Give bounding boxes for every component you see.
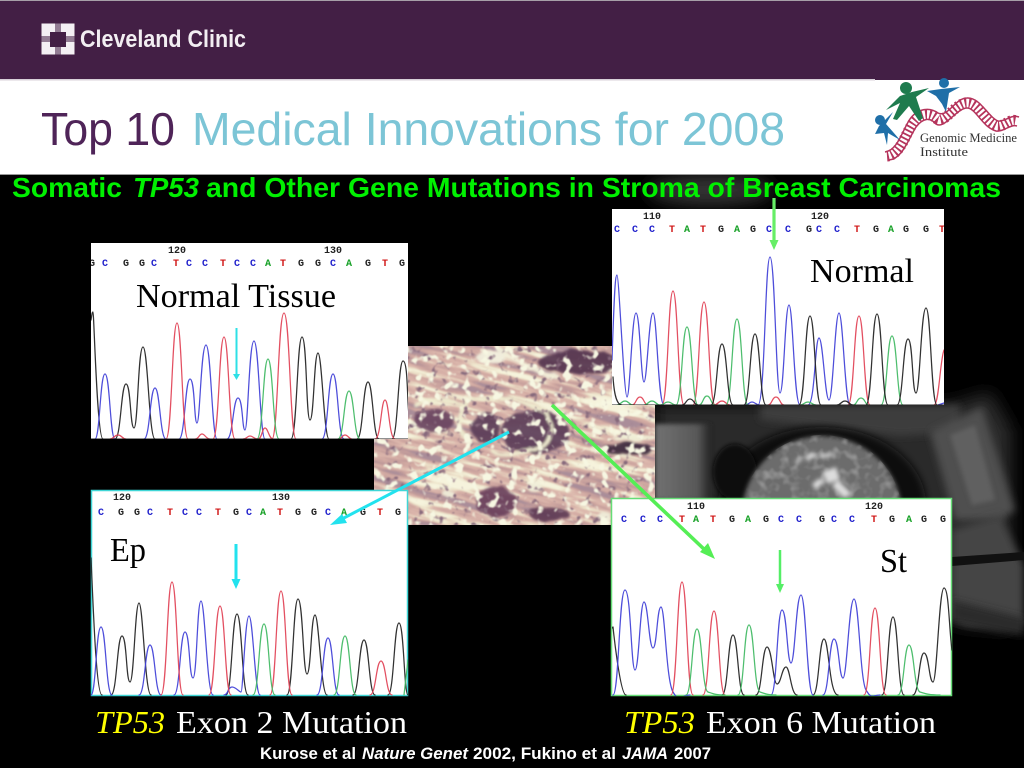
- position numbers: 130: [324, 246, 342, 257]
- caption: exon 2: TP53: [95, 704, 165, 740]
- specimen mound: [741, 434, 903, 498]
- base sequence: T: [277, 508, 283, 519]
- base sequence: G: [298, 259, 304, 270]
- label: Normal Tissue: Normal Tissue: [136, 278, 336, 315]
- position numbers: 120: [811, 212, 829, 223]
- base sequence: T: [215, 508, 221, 519]
- base sequence: T: [854, 225, 860, 236]
- base sequence: C: [202, 259, 208, 270]
- caption: exon 2: Exon 2 Mutation: [176, 704, 407, 740]
- base sequence: T: [871, 515, 877, 526]
- base sequence: [614, 226, 944, 232]
- base sequence: C: [796, 515, 802, 526]
- citation: [260, 745, 711, 763]
- base sequence: C: [649, 225, 655, 236]
- white title band: [0, 78, 1024, 175]
- background photo: surgical specimen: [648, 174, 1024, 636]
- panel: stroma chromatogram: [612, 498, 952, 698]
- citation: Nature Genet: [362, 745, 470, 763]
- base sequence: G: [315, 259, 321, 270]
- base sequence: A: [260, 508, 266, 519]
- chromatogram traces: [91, 558, 408, 695]
- base sequence: G: [295, 508, 301, 519]
- base sequence: T: [700, 225, 706, 236]
- base sequence: A: [684, 225, 690, 236]
- caption: exon 6: [624, 704, 936, 740]
- arrow: cyan marker: [233, 328, 240, 380]
- base sequence: G: [365, 259, 371, 270]
- base sequence: T: [280, 259, 286, 270]
- base sequence: A: [734, 225, 740, 236]
- base sequence: G: [395, 508, 401, 519]
- base sequence: C: [98, 508, 104, 519]
- base sequence: C: [246, 508, 252, 519]
- base sequence: G: [123, 259, 129, 270]
- base sequence: C: [234, 259, 240, 270]
- base sequence: G: [718, 225, 724, 236]
- base sequence: G: [139, 259, 145, 270]
- base sequence: C: [614, 225, 620, 236]
- position numbers: 120: [113, 493, 131, 504]
- base sequence: G: [819, 515, 825, 526]
- icon: Cleveland Clinic mark: [42, 24, 74, 55]
- chromatogram traces: [612, 582, 952, 698]
- base sequence: A: [341, 508, 347, 519]
- base sequence: T: [939, 225, 945, 236]
- base sequence: T: [220, 259, 226, 270]
- base sequence: G: [873, 225, 879, 236]
- citation: 2007: [674, 745, 711, 763]
- base sequence: A: [693, 515, 699, 526]
- position numbers: [113, 493, 290, 504]
- base sequence: T: [669, 225, 675, 236]
- label: Normal: Normal: [810, 253, 914, 290]
- header band with logo: [0, 0, 1024, 80]
- citation: 2002, Fukino et al: [473, 745, 616, 763]
- logo caption: [920, 131, 1017, 159]
- base sequence: C: [657, 515, 663, 526]
- green figure: [886, 82, 929, 121]
- base sequence: T: [710, 515, 716, 526]
- base sequence: G: [233, 508, 239, 519]
- position numbers: [643, 212, 829, 223]
- base sequence: C: [834, 225, 840, 236]
- base sequence: T: [679, 515, 685, 526]
- base sequence: G: [399, 259, 405, 270]
- icon: Genomic Medicine Institute logo: [875, 78, 1019, 160]
- caption: exon 2: [95, 704, 407, 740]
- banner heading: Top 10: [41, 103, 175, 155]
- slide title: Somatic: [12, 172, 122, 203]
- blue figures: [875, 78, 960, 145]
- base sequence: A: [265, 259, 271, 270]
- base sequence: C: [785, 225, 791, 236]
- panel: epithelium chromatogram: [91, 490, 408, 696]
- logo caption: Institute: [920, 145, 969, 159]
- slide title: TP53: [133, 172, 199, 203]
- base sequence: G: [118, 508, 124, 519]
- base sequence: G: [923, 225, 929, 236]
- base sequence: T: [167, 508, 173, 519]
- position numbers: 120: [865, 502, 883, 513]
- base sequence: G: [311, 508, 317, 519]
- base sequence: C: [151, 259, 157, 270]
- position numbers: 110: [687, 502, 705, 513]
- logo caption: Genomic Medicine: [920, 131, 1017, 145]
- base sequence: C: [182, 508, 188, 519]
- base sequence: [91, 260, 404, 266]
- arrow: green from tissue to St panel: [552, 405, 715, 559]
- chromatogram traces: [91, 312, 409, 439]
- base sequence: C: [831, 515, 837, 526]
- label: St: St: [880, 543, 908, 580]
- base sequence: C: [849, 515, 855, 526]
- base sequence: C: [766, 225, 772, 236]
- base sequence: T: [173, 259, 179, 270]
- base sequence: G: [89, 259, 95, 270]
- base sequence: G: [940, 515, 946, 526]
- caption: exon 6: TP53: [624, 704, 695, 740]
- slide title: and Other Gene Mutations in Stroma of Breast Carcinomas: [206, 172, 1001, 203]
- label: Ep: Ep: [110, 532, 146, 569]
- chromatogram traces: [612, 257, 944, 405]
- base sequence: G: [360, 508, 366, 519]
- base sequence: G: [921, 515, 927, 526]
- base sequence: A: [745, 515, 751, 526]
- base sequence: G: [763, 515, 769, 526]
- histology image: breast carcinoma tissue: [374, 346, 655, 525]
- base sequence: [621, 516, 946, 522]
- dna helix: [885, 98, 1019, 160]
- base sequence: C: [632, 225, 638, 236]
- base sequence: C: [778, 515, 784, 526]
- panel: stroma normal chromatogram: [612, 209, 945, 405]
- base sequence: C: [196, 508, 202, 519]
- citation: JAMA: [622, 745, 668, 763]
- base sequence: C: [621, 515, 627, 526]
- position numbers: 120: [168, 246, 186, 257]
- base sequence: C: [640, 515, 646, 526]
- arrow: cyan from tissue to Ep panel: [330, 432, 509, 525]
- base sequence: C: [816, 225, 822, 236]
- base sequence: G: [806, 225, 812, 236]
- base sequence: C: [102, 259, 108, 270]
- base sequence: A: [906, 515, 912, 526]
- base sequence: G: [134, 508, 140, 519]
- base sequence: G: [750, 225, 756, 236]
- base sequence: [98, 508, 401, 519]
- base sequence: T: [382, 259, 388, 270]
- position numbers: 130: [272, 493, 290, 504]
- base sequence: A: [888, 225, 894, 236]
- base sequence: C: [186, 259, 192, 270]
- citation: Kurose et al: [260, 745, 356, 763]
- base sequence: G: [903, 225, 909, 236]
- panel: normal tissue chromatogram: [89, 243, 409, 439]
- base sequence: G: [889, 515, 895, 526]
- arrow: green marker on normal panel: [770, 198, 778, 250]
- arrow: cyan marker: [232, 544, 240, 589]
- base sequence: A: [346, 259, 352, 270]
- caption: exon 6: Exon 6 Mutation: [706, 704, 936, 740]
- banner heading: Medical Innovations for 2008: [192, 103, 785, 155]
- arrow: green marker: [776, 550, 784, 593]
- base sequence: C: [147, 508, 153, 519]
- base sequence: G: [729, 515, 735, 526]
- base sequence: C: [330, 259, 336, 270]
- base sequence: C: [250, 259, 256, 270]
- position numbers: 110: [643, 212, 661, 223]
- base sequence: T: [377, 508, 383, 519]
- position numbers: [168, 246, 342, 257]
- position numbers: [687, 502, 883, 513]
- logotype: Cleveland Clinic: [80, 26, 246, 53]
- base sequence: C: [325, 508, 331, 519]
